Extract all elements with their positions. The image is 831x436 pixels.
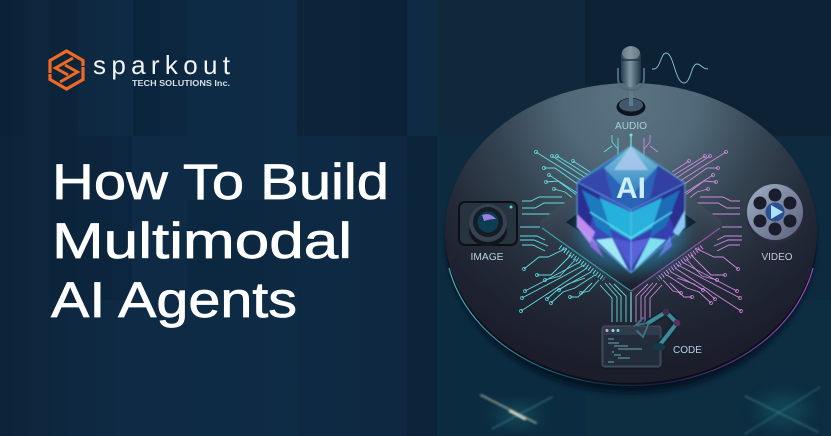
title: Multimodal (52, 213, 352, 269)
icon: orange hexagon S mark (50, 51, 83, 89)
wordmark: sparkout (93, 50, 231, 80)
top face (577, 146, 685, 210)
label: video: VIDEO (762, 251, 792, 263)
icon: AI crystal cube (576, 146, 686, 273)
teal traces (520, 134, 632, 322)
faint sparkle (745, 387, 820, 434)
chip glow edges (542, 228, 631, 291)
disc edge (445, 88, 817, 384)
icon: audio wave (652, 53, 708, 83)
icon: robot arm (636, 308, 680, 351)
panel: central disc (445, 83, 817, 393)
mic base (616, 98, 646, 116)
disc shadow (447, 91, 815, 393)
logo (50, 50, 231, 89)
chip (540, 156, 722, 291)
label: audio: AUDIO (615, 120, 647, 132)
icon: film reel (747, 184, 803, 243)
label: image: IMAGE (470, 251, 504, 263)
icon: code window (602, 326, 661, 370)
cube label: AI (616, 172, 646, 205)
left face (577, 182, 631, 273)
label: code: CODE (673, 344, 702, 356)
circuit traces (520, 134, 742, 322)
mic head (621, 46, 641, 87)
chip recess (566, 176, 696, 268)
sparkles (481, 387, 820, 434)
title: How To Build (52, 154, 389, 210)
right face (631, 183, 685, 273)
icon: microphone (616, 46, 646, 116)
title (51, 154, 389, 328)
icon: camera (459, 202, 517, 246)
mic cradle (618, 68, 644, 90)
bright sparkle (481, 395, 552, 429)
title: AI Agents (51, 272, 297, 328)
glowing edges (577, 146, 685, 273)
tagline: TECH SOLUTIONS Inc. (132, 79, 230, 88)
purple traces (636, 135, 742, 322)
